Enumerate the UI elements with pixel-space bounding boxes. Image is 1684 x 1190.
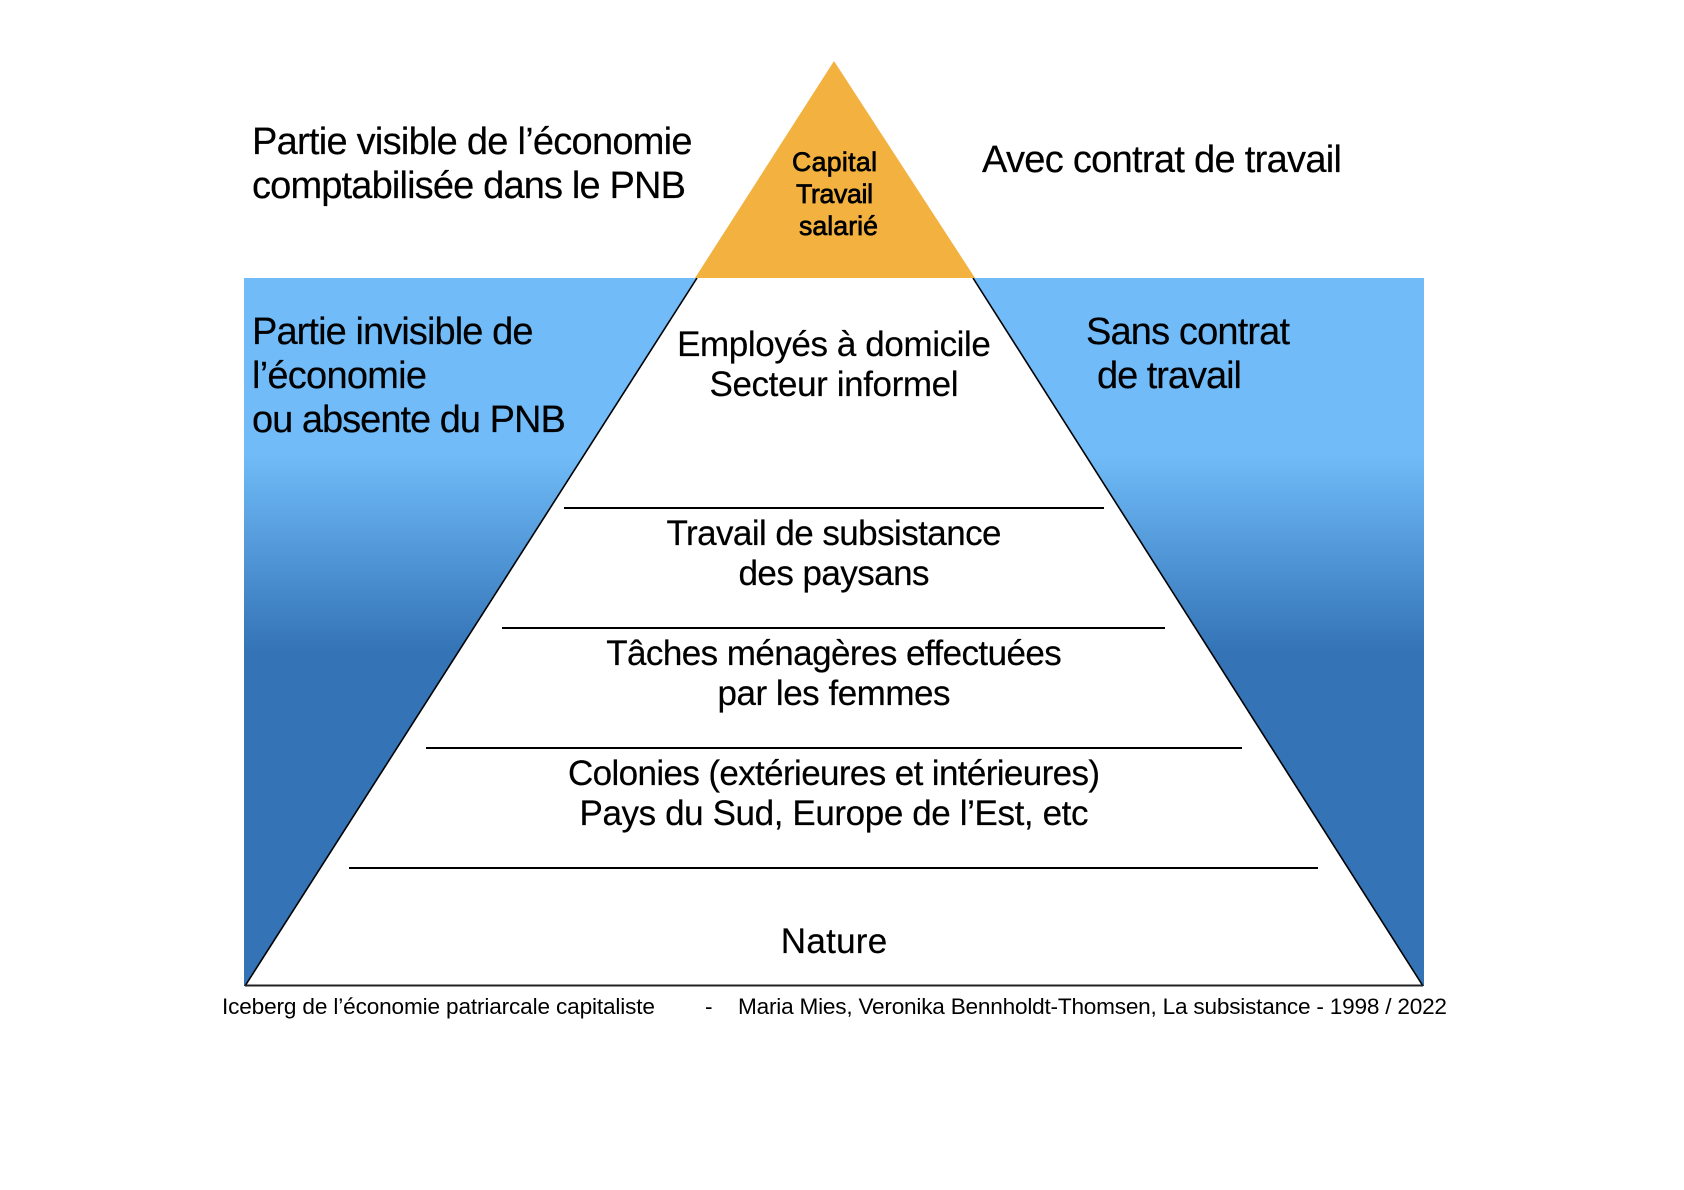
text: tip label: Travail — [796, 179, 873, 209]
text: tip label — [792, 147, 878, 241]
text: without work contract — [1086, 311, 1290, 397]
text: home workers and informal sector: Employés à domicile — [677, 325, 991, 364]
text: colonies: Colonies (extérieures et intérieures) — [568, 754, 1100, 793]
text: household tasks: par les femmes — [718, 674, 950, 713]
text: without work contract: de travail — [1097, 355, 1242, 397]
text: colonies: Pays du Sud, Europe de l’Est, etc — [580, 794, 1088, 833]
text: visible part of the economy: Partie visible de l’économie — [252, 121, 692, 163]
text: with work contract: Avec contrat de travail — [982, 139, 1342, 181]
caption: source: Iceberg de l’économie patriarcale capitaliste — [222, 994, 655, 1019]
text: home workers and informal sector: Secteur informel — [710, 365, 958, 404]
caption: source: Maria Mies, Veronika Bennholdt-Thomsen, La subsistance - 1998 / 2022 — [738, 994, 1447, 1019]
text: invisible part of the economy: l’économie — [252, 355, 427, 397]
text: peasant subsistance work — [666, 514, 1002, 593]
text: household tasks: Tâches ménagères effectuées — [606, 634, 1062, 673]
text: invisible part of the economy: Partie invisible de — [252, 311, 534, 353]
panel: visible tip of iceberg — [695, 61, 975, 278]
text: home workers and informal sector — [677, 325, 991, 404]
text: peasant subsistance work: Travail de subsistance — [666, 514, 1002, 553]
text: colonies — [568, 754, 1100, 833]
text: without work contract: Sans contrat — [1086, 311, 1290, 353]
panel: water background — [244, 278, 1424, 986]
text: tip label: salarié — [799, 211, 878, 241]
text: invisible part of the economy: ou absente du PNB — [252, 399, 566, 441]
text: invisible part of the economy — [252, 311, 566, 441]
text: tip label: Capital — [792, 147, 877, 177]
caption: source — [222, 994, 1447, 1019]
text: household tasks — [606, 634, 1062, 713]
text: peasant subsistance work: des paysans — [738, 554, 930, 593]
text: visible part of the economy — [252, 121, 692, 207]
text: nature: Nature — [781, 922, 887, 961]
caption: source: - — [705, 994, 713, 1019]
level dividers — [349, 508, 1318, 868]
panel: submerged iceberg — [245, 278, 1423, 986]
text: visible part of the economy: comptabilisée dans le PNB — [252, 165, 686, 207]
